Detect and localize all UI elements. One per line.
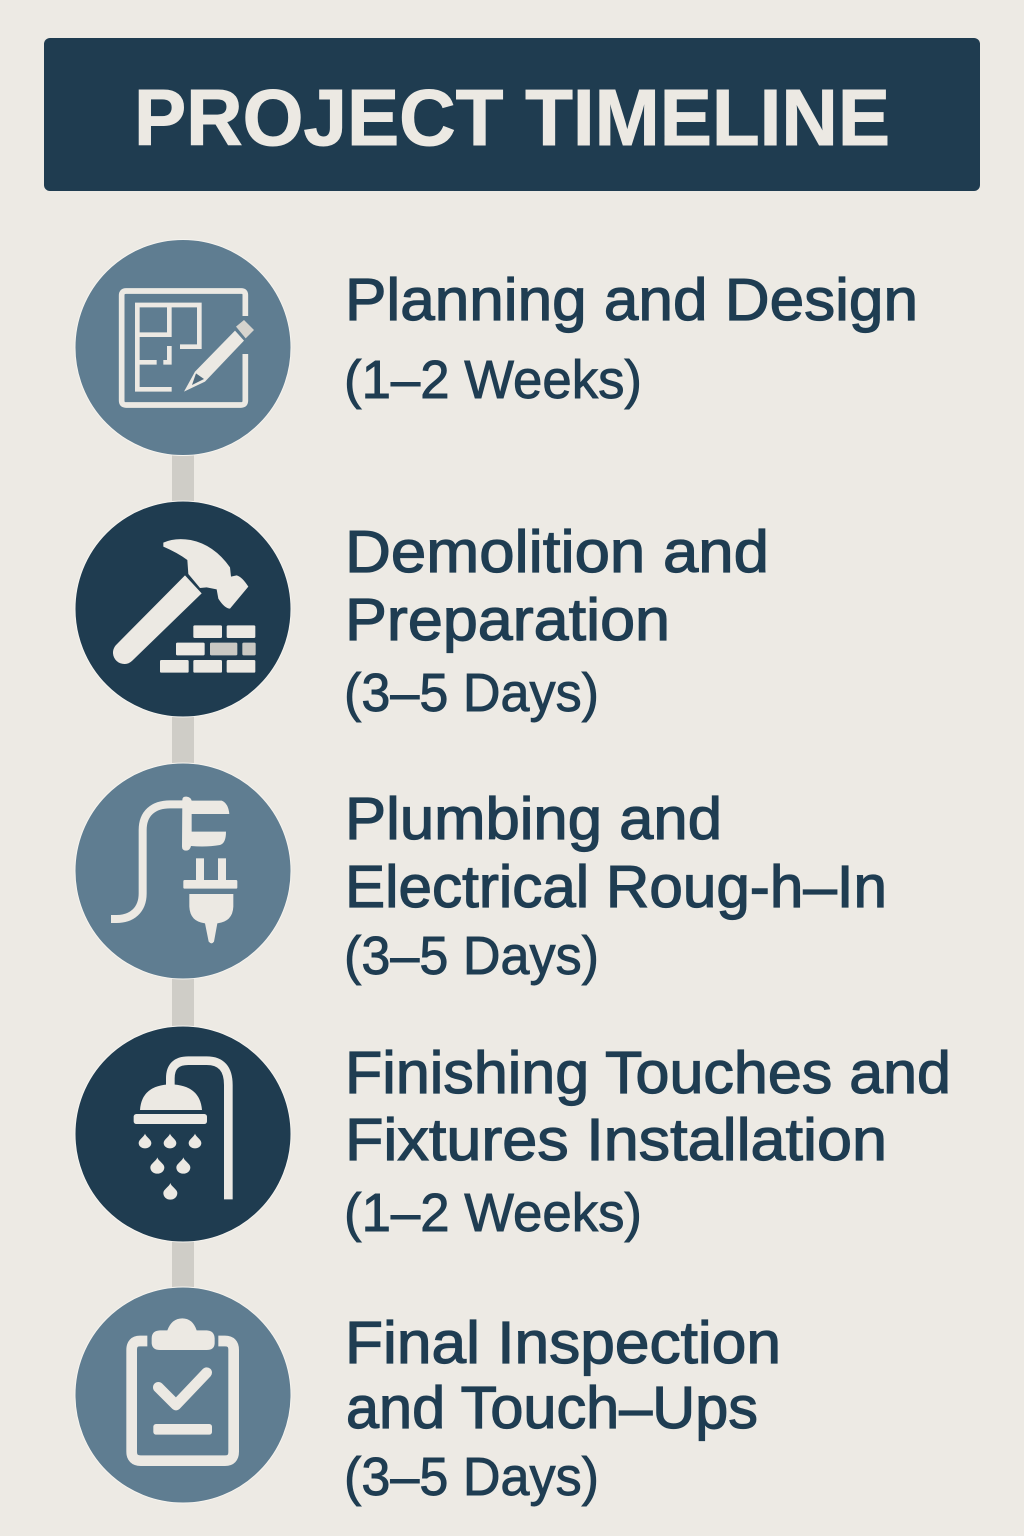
step 4: finishing touches and fixtures installation	[75, 1026, 951, 1243]
step 5: final inspection and touch-ups	[75, 1287, 781, 1507]
connector: step 4 to 5	[172, 1237, 194, 1293]
connector: step 1 to 2	[172, 450, 194, 506]
step 4 text: (1–2 Weeks)	[344, 1183, 642, 1243]
step 4 text: Finishing Touches and	[345, 1040, 951, 1106]
icon: pipe and plug	[111, 797, 237, 943]
title banner	[44, 38, 980, 191]
circle badge 1	[75, 240, 291, 456]
step 3 text: (3–5 Days)	[344, 926, 599, 986]
step 4 text: Fixtures Installation	[345, 1107, 887, 1173]
step 1 text: (1–2 Weeks)	[344, 350, 642, 410]
step 2 text: Demolition and	[345, 519, 769, 585]
connector: step 2 to 3	[172, 712, 194, 768]
step 2 text	[344, 519, 769, 723]
step 3 text: Electrical Roug-h–In	[345, 854, 887, 920]
circle badge 5	[75, 1287, 291, 1503]
title: PROJECT TIMELINE	[134, 73, 890, 162]
icon: hammer and bricks	[113, 539, 256, 673]
step 3 text	[344, 786, 887, 986]
icon: clipboard with check	[132, 1318, 234, 1461]
step 4 text	[344, 1040, 951, 1243]
step 1 text	[344, 267, 918, 410]
circle badge 2	[75, 501, 291, 717]
step 5 text	[344, 1310, 781, 1507]
step 3: plumbing and electrical rough-in	[75, 763, 887, 986]
step 5 text: Final Inspection	[345, 1310, 781, 1376]
step 2 text: (3–5 Days)	[344, 663, 599, 723]
icon: shower head	[134, 1061, 228, 1200]
circle badge 4	[75, 1026, 291, 1242]
connector: step 3 to 4	[172, 974, 194, 1030]
step 1 text: Planning and Design	[345, 267, 918, 333]
step 5 text: (3–5 Days)	[344, 1447, 599, 1507]
icon: floor plan and pencil	[122, 291, 254, 405]
step 5 text: and Touch–Ups	[346, 1375, 758, 1441]
step 2: demolition and preparation	[75, 501, 769, 723]
step 2 text: Preparation	[345, 587, 670, 653]
step 3 text: Plumbing and	[345, 786, 722, 852]
circle badge 3	[75, 763, 291, 979]
step 1: planning and design	[75, 240, 918, 456]
